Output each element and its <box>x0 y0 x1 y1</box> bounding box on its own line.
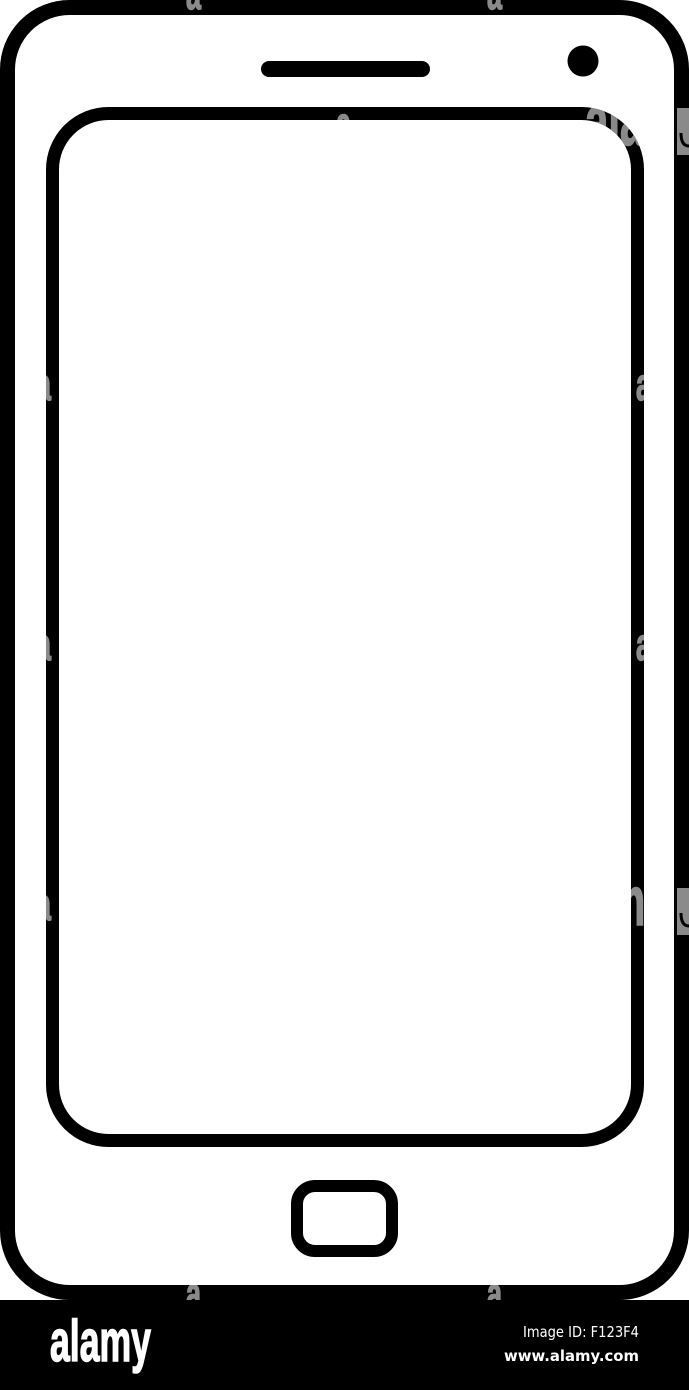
watermark fragments: a <box>487 1268 502 1319</box>
image id: Image ID: F123F4 <box>523 1323 639 1341</box>
watermark fragments: a <box>36 879 51 930</box>
screen outline <box>52 114 638 1140</box>
footer bar <box>0 1300 689 1390</box>
watermark fragments: a <box>636 619 651 670</box>
watermark fragments: a <box>36 359 51 410</box>
watermark fragments: a <box>36 619 51 670</box>
watermark fragments: m <box>608 863 645 941</box>
front camera <box>568 46 598 76</box>
website: www.alamy.com <box>504 1347 639 1365</box>
watermark fragments: a <box>336 98 351 149</box>
watermark fragments: ala <box>585 83 644 161</box>
alamy logo: alamy <box>50 1309 151 1374</box>
watermark fragments: a <box>636 359 651 410</box>
watermark fragments: a <box>186 1268 201 1319</box>
home button <box>297 1186 392 1251</box>
speaker slot <box>261 61 430 77</box>
